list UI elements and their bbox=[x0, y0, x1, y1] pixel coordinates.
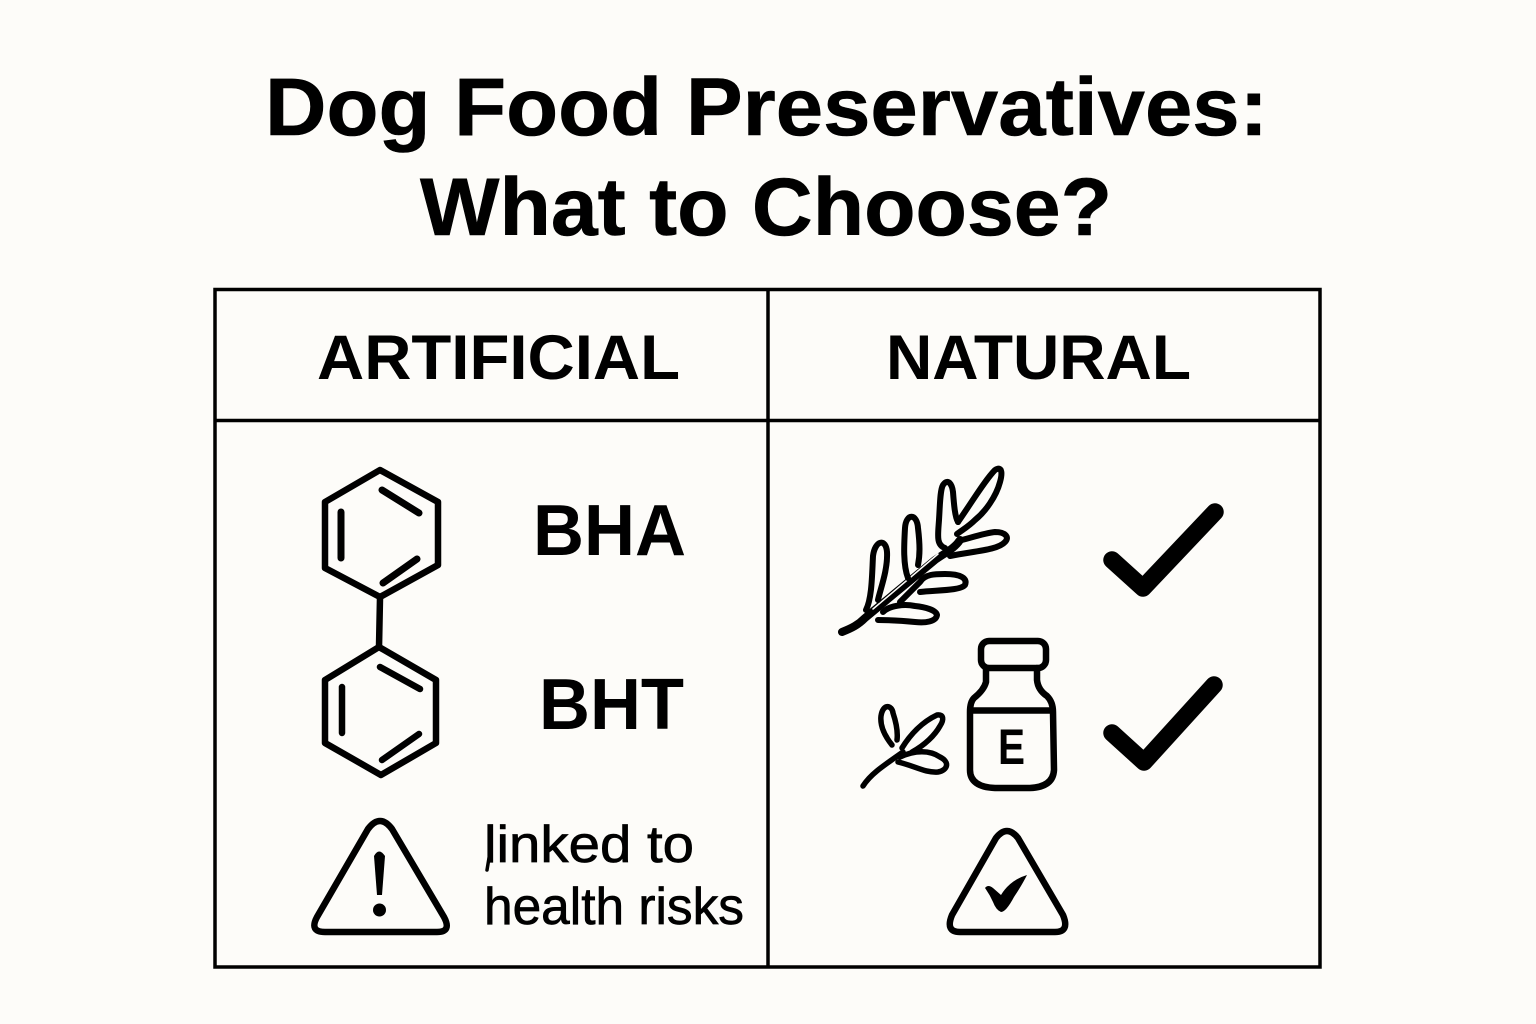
panel: artificial bbox=[314, 470, 744, 936]
icon: check mark for vitamin E bbox=[1112, 685, 1214, 762]
label: BHT: BHT bbox=[539, 665, 684, 745]
icon: warning triangle bbox=[314, 821, 447, 932]
icon: check mark for rosemary bbox=[1112, 512, 1215, 588]
icon: vitamin E bottle: E bbox=[998, 719, 1025, 775]
icon: biphenyl molecule bbox=[325, 470, 438, 775]
title bbox=[265, 62, 1268, 253]
column heading: natural: NATURAL bbox=[886, 323, 1191, 393]
text: health risk note: linked to bbox=[484, 816, 694, 874]
table grid bbox=[215, 289, 1320, 967]
icon: rosemary sprig bbox=[842, 469, 1007, 632]
title: What to Choose? bbox=[420, 162, 1112, 253]
comparison table bbox=[215, 289, 1320, 967]
label: BHA: BHA bbox=[533, 491, 686, 571]
icon: small leaf sprig bbox=[863, 707, 947, 786]
panel: natural bbox=[842, 469, 1215, 932]
icon: safe triangle with check bbox=[950, 831, 1065, 932]
text: health risk note: health risks bbox=[484, 878, 744, 936]
title: Dog Food Preservatives: bbox=[265, 62, 1268, 153]
icon: vitamin E bottle bbox=[970, 641, 1054, 788]
column heading: artificial: ARTIFICIAL bbox=[317, 323, 680, 393]
text: health risk note bbox=[484, 816, 744, 936]
